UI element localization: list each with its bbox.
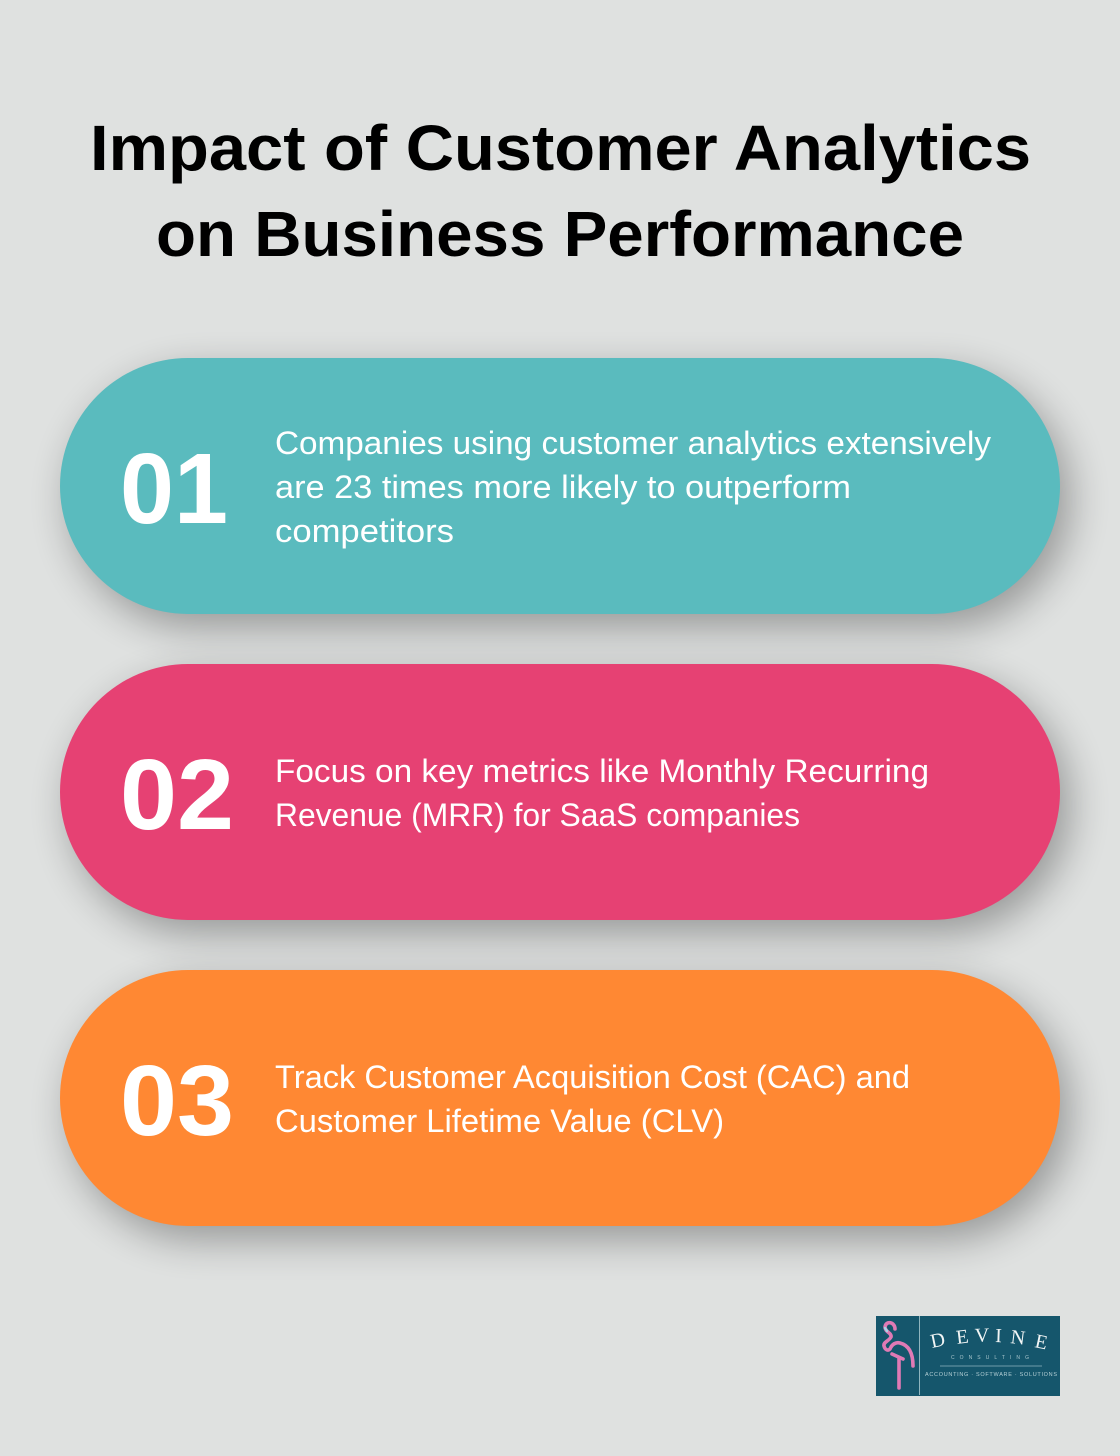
icon: flamingo bbox=[884, 1323, 913, 1388]
logo: Devine Consulting: CONSULTING bbox=[951, 1355, 1029, 1361]
text: step 01 description: are 23 times more likely to outperform bbox=[275, 469, 851, 505]
logo wordmark: DEVINE bbox=[928, 1324, 1049, 1354]
number 01: 01 bbox=[120, 433, 228, 545]
logo: Devine Consulting bbox=[876, 1316, 1060, 1396]
number 02: 02 bbox=[120, 739, 234, 851]
pill background pink bbox=[60, 664, 1060, 920]
text: step 01 description: Companies using customer analytics extensively bbox=[275, 425, 991, 461]
text: step 01 description: competitors bbox=[275, 513, 454, 549]
text: step 03 description: Track Customer Acquisition Cost (CAC) and bbox=[275, 1059, 910, 1095]
text: step 01 description bbox=[275, 425, 991, 549]
text: step 03 description: Customer Lifetime Value (CLV) bbox=[275, 1103, 724, 1139]
text: step 03 description bbox=[275, 1059, 910, 1139]
text: step 02 description: Revenue (MRR) for SaaS companies bbox=[275, 797, 800, 833]
panel: step 03 bbox=[60, 970, 1070, 1240]
title: on Business Performance bbox=[156, 198, 964, 270]
pill background orange bbox=[60, 970, 1060, 1226]
title bbox=[90, 112, 1031, 270]
text: step 02 description bbox=[275, 753, 929, 833]
panel: step 01 bbox=[60, 358, 1070, 628]
pill background teal bbox=[60, 358, 1060, 614]
number 03: 03 bbox=[120, 1045, 234, 1157]
logo: Devine Consulting: ACCOUNTING · SOFTWARE · SOLUTIONS bbox=[925, 1372, 1057, 1378]
title: Impact of Customer Analytics bbox=[90, 112, 1031, 184]
text: step 02 description: Focus on key metrics like Monthly Recurring bbox=[275, 753, 929, 789]
panel: step 02 bbox=[60, 664, 1070, 934]
